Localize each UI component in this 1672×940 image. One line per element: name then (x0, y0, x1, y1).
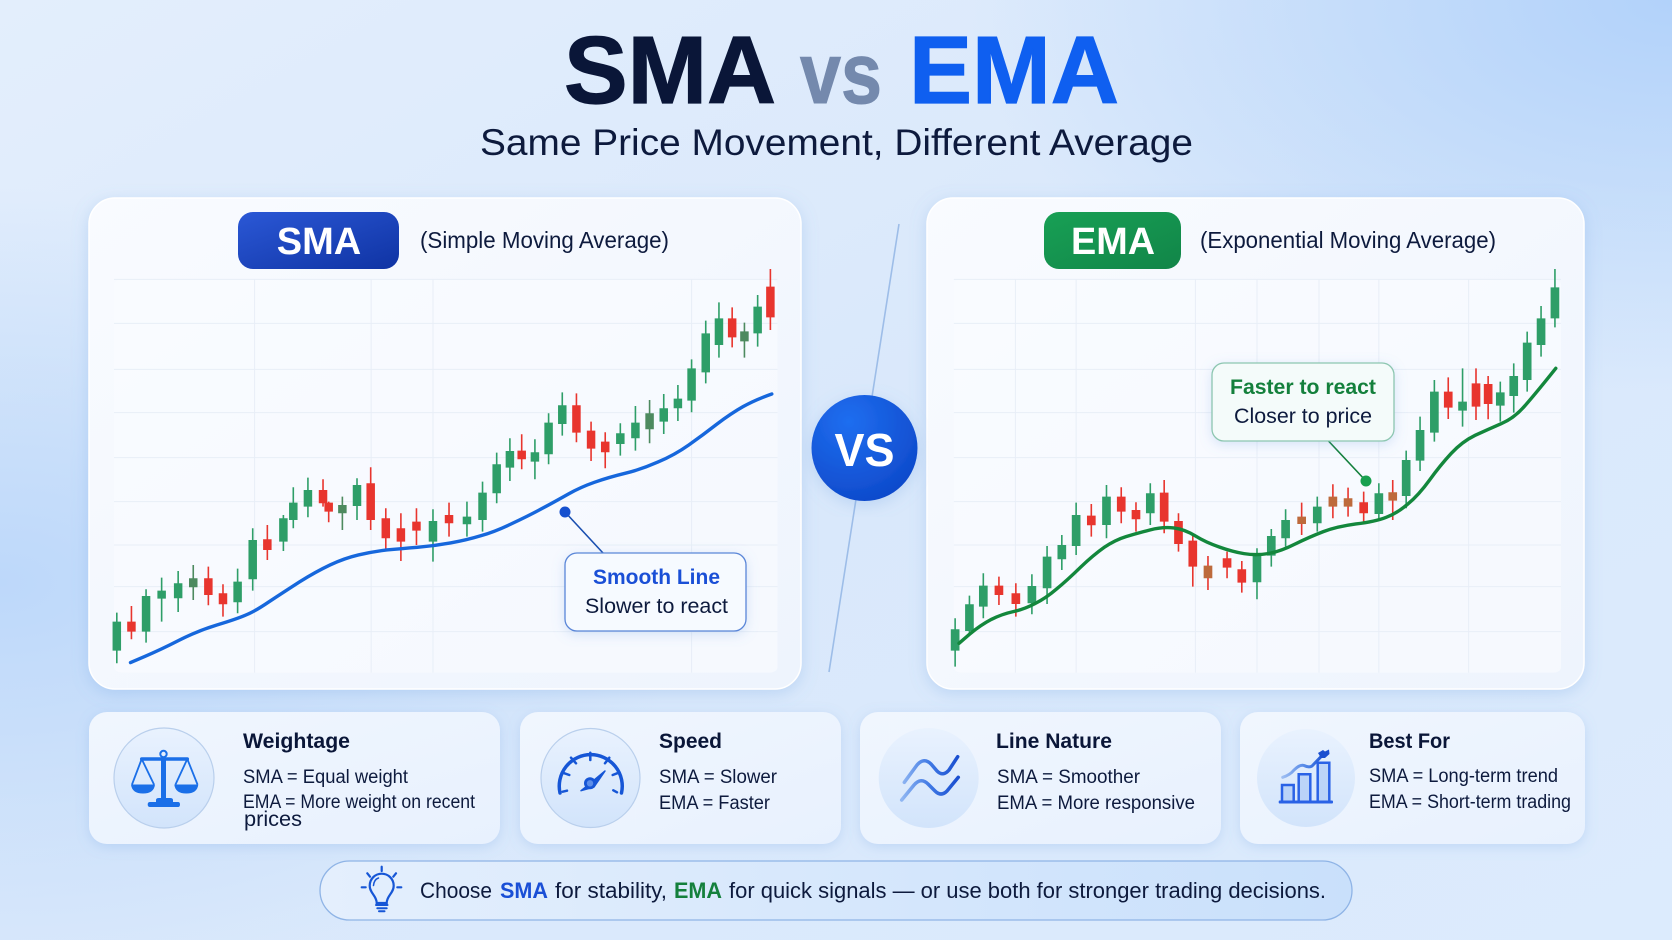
EMA moving average line (959, 368, 1556, 643)
Best For text: SMA = Long-term trend (1369, 766, 1558, 787)
EMA badge: EMA (1071, 221, 1155, 263)
icon: growth chart (1257, 729, 1355, 827)
EMA callout: Faster to react (1230, 376, 1376, 399)
Line Nature text: SMA = Smoother (997, 767, 1141, 788)
Best For text: Best For (1369, 730, 1450, 753)
icon: balance scale (114, 728, 214, 828)
SMA chart (113, 269, 777, 673)
Speed text (659, 730, 778, 814)
panel: Speed (520, 712, 841, 844)
EMA callout: Closer to price (1234, 405, 1372, 428)
Speed text: Speed (659, 730, 722, 753)
subtitle: Same Price Movement, Different Average (480, 122, 1193, 163)
VS circle: VS (834, 424, 894, 476)
Best For text: EMA = Short-term trading (1369, 792, 1571, 813)
EMA chart (951, 269, 1561, 673)
panel: Weightage (89, 712, 500, 844)
title: EMA (909, 17, 1119, 124)
panel: EMA (927, 198, 1584, 689)
banner text (420, 878, 1326, 903)
Weightage text: EMA = More weight on recent (243, 792, 476, 813)
SMA moving average line (130, 394, 772, 663)
banner text: EMA (674, 878, 722, 903)
VS circle (812, 395, 918, 501)
divider line (829, 224, 899, 672)
banner text: SMA (500, 878, 548, 903)
Weightage text: SMA = Equal weight (243, 767, 409, 788)
SMA callout (560, 506, 746, 631)
EMA callout (1212, 363, 1394, 486)
panel: Best For (1240, 712, 1585, 844)
Weightage text: prices (244, 808, 302, 831)
SMA callout: Smooth Line (593, 566, 720, 589)
Line Nature text: Line Nature (996, 730, 1112, 753)
callout banner (320, 861, 1352, 920)
EMA candlesticks (951, 269, 1559, 667)
banner text: for stability, (555, 878, 667, 903)
Speed text: EMA = Faster (659, 793, 771, 814)
SMA badge (238, 212, 399, 269)
EMA badge (1044, 212, 1181, 269)
Weightage text (243, 730, 476, 831)
title: SMA (564, 17, 776, 124)
Speed text: SMA = Slower (659, 767, 778, 788)
banner text: Choose (420, 878, 492, 903)
icon: speedometer (541, 728, 640, 828)
SMA callout: Slower to react (585, 595, 728, 618)
icon: light bulb (362, 867, 401, 911)
SMA candlesticks (113, 269, 775, 663)
panel: SMA (89, 198, 801, 689)
title (564, 17, 1119, 124)
icon: two waves (879, 728, 979, 828)
Line Nature text (996, 730, 1195, 814)
Line Nature text: EMA = More responsive (997, 793, 1195, 814)
EMA full name: (Exponential Moving Average) (1200, 227, 1496, 253)
SMA full name: (Simple Moving Average) (420, 227, 669, 253)
banner text: for quick signals — or use both for stronger trading decisions. (729, 878, 1326, 903)
panel: Line Nature (860, 712, 1221, 844)
Weightage text: Weightage (243, 730, 350, 753)
Best For text (1369, 730, 1571, 813)
SMA badge: SMA (277, 221, 361, 263)
title: vs (800, 26, 882, 122)
